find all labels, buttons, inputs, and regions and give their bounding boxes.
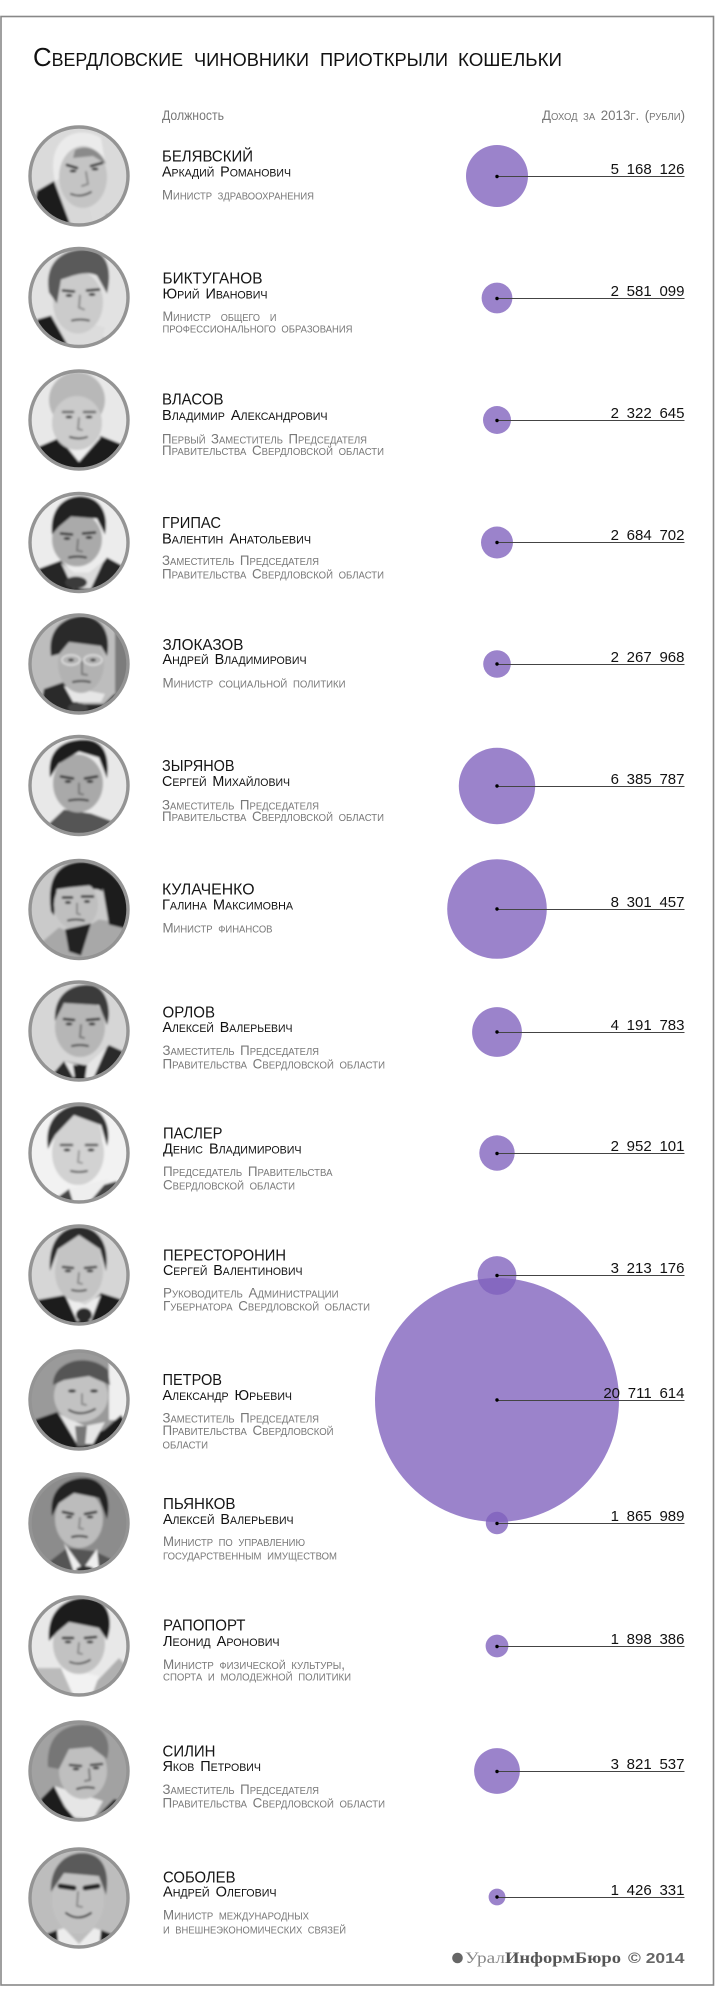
leader line	[495, 419, 684, 422]
bubble: income	[447, 859, 547, 959]
row: Рапопорт	[27, 1594, 684, 1698]
position	[162, 1781, 385, 1810]
photo: Биктуганов	[27, 246, 131, 350]
leader line	[495, 1522, 684, 1525]
title: Свердловские	[33, 42, 183, 72]
value: 2 267 968	[611, 649, 684, 666]
position: спорта и молодежной политики	[163, 1668, 351, 1684]
row: Петров	[27, 1278, 684, 1522]
surname: ПЕРЕСТОРОНИН	[163, 1248, 286, 1265]
position: Заместитель Председателя	[162, 552, 319, 568]
position	[163, 1533, 337, 1562]
photo: Орлов	[27, 979, 131, 1083]
leader line	[495, 175, 684, 178]
bubble: income	[479, 1135, 515, 1171]
position: Заместитель Председателя	[162, 1042, 319, 1058]
position: Свердловской области	[163, 1176, 295, 1192]
row: Белявский	[27, 124, 684, 228]
bubble: income	[483, 406, 511, 434]
position: Заместитель Председателя	[162, 1781, 319, 1797]
bubble: income	[478, 1256, 516, 1295]
leader line	[495, 784, 684, 788]
position: Правительства Свердловской области	[162, 808, 384, 824]
bubble: income	[481, 526, 513, 558]
value: 6 385 787	[611, 771, 684, 788]
bubble: income	[472, 1007, 522, 1057]
row: Злоказов	[27, 612, 684, 716]
position: Председатель Правительства	[163, 1163, 333, 1179]
value: 1 898 386	[611, 1631, 684, 1648]
leader line	[495, 1274, 684, 1277]
footer credit	[452, 1950, 685, 1967]
bubble: income	[486, 1512, 508, 1534]
position	[162, 552, 384, 581]
position	[162, 1042, 385, 1071]
position: профессионального образования	[162, 320, 352, 336]
bubble: income	[482, 283, 512, 313]
row: Силин	[27, 1719, 684, 1823]
leader line	[495, 1398, 684, 1402]
position: Министр физической культуры,	[163, 1656, 345, 1672]
surname: ОРЛОВ	[162, 1005, 215, 1022]
given names: Сергей Михайлович	[162, 773, 290, 790]
position: государственным имуществом	[163, 1546, 337, 1562]
bubble: income	[489, 1889, 505, 1905]
row: Биктуганов	[27, 246, 684, 350]
value: 2 322 645	[611, 405, 684, 422]
bubble: income	[474, 1748, 520, 1794]
position: Правительства Свердловской	[162, 1422, 334, 1438]
photo: Зырянов	[27, 734, 131, 838]
column heading: position: Должность	[162, 107, 224, 123]
given names: Алексей Валерьевич	[163, 1511, 294, 1528]
bubble: income	[483, 650, 511, 678]
photo: Пересторонин	[27, 1223, 131, 1327]
value: 1 426 331	[611, 1882, 684, 1899]
given names: Юрий Иванович	[162, 285, 268, 302]
row: Пересторонин	[27, 1223, 684, 1327]
title: кошельки	[458, 42, 562, 72]
value: 4 191 783	[611, 1017, 684, 1034]
position: Министр международных	[163, 1906, 309, 1922]
position: Губернатора Свердловской области	[163, 1298, 370, 1314]
surname: КУЛАЧЕНКО	[162, 882, 254, 899]
leader line	[495, 1030, 684, 1034]
position: Заместитель Председателя	[162, 796, 319, 812]
bubble: income	[459, 748, 535, 824]
row: Грипас	[27, 490, 684, 594]
given names: Валентин Анатольевич	[162, 530, 311, 547]
position: Правительства Свердловской области	[162, 442, 384, 458]
surname: ПЬЯНКОВ	[163, 1496, 236, 1513]
position	[163, 1163, 333, 1192]
leader line	[495, 1895, 684, 1899]
row: Соболев	[27, 1846, 684, 1950]
value: 8 301 457	[611, 894, 684, 911]
position: Первый Заместитель Председателя	[162, 430, 367, 446]
surname: ПАСЛЕР	[163, 1126, 222, 1143]
given names: Александр Юрьевич	[162, 1387, 292, 1404]
row: Паслер	[27, 1101, 684, 1205]
position: и внешнеэкономических связей	[163, 1920, 346, 1936]
row: Пьянков	[27, 1471, 684, 1575]
row: Кулаченко	[27, 858, 684, 962]
position: Министр здравоохранения	[162, 186, 314, 202]
surname: ПЕТРОВ	[162, 1372, 222, 1389]
given names: Аркадий Романович	[162, 164, 291, 181]
title: приоткрыли	[320, 42, 448, 72]
position: Заместитель Председателя	[162, 1410, 319, 1426]
value: 5 168 126	[611, 161, 684, 178]
photo: Паслер	[27, 1101, 131, 1205]
value: 2 684 702	[611, 527, 684, 544]
position: Министр общего и	[162, 308, 276, 324]
surname: БЕЛЯВСКИЙ	[162, 147, 253, 166]
value: 3 821 537	[611, 1756, 684, 1773]
given names: Денис Владимирович	[163, 1140, 302, 1157]
photo: Рапопорт	[27, 1594, 131, 1698]
photo: Силин	[27, 1719, 131, 1823]
leader line	[495, 1770, 684, 1773]
position: области	[162, 1435, 208, 1451]
surname: РАПОПОРТ	[163, 1618, 246, 1635]
bubble: income	[375, 1278, 619, 1522]
given names: Яков Петрович	[162, 1758, 261, 1775]
position	[162, 430, 384, 458]
photo: Петров	[27, 1348, 131, 1452]
leader line	[495, 1645, 684, 1648]
position: Министр по управлению	[163, 1533, 305, 1549]
position: Руководитель Администрации	[163, 1285, 338, 1301]
photo: Белявский	[27, 124, 131, 228]
row: Орлов	[27, 979, 684, 1083]
position	[162, 1410, 334, 1451]
value: 2 952 101	[611, 1138, 684, 1155]
bubble: income	[486, 1635, 508, 1657]
position	[163, 1285, 370, 1314]
position	[162, 308, 352, 336]
bubble: income	[466, 145, 528, 207]
leader line	[495, 541, 684, 544]
position: Правительства Свердловской области	[162, 1055, 385, 1071]
value: 20 711 614	[603, 1385, 684, 1402]
leader line	[495, 1152, 684, 1155]
row: Власов	[27, 368, 684, 472]
photo: Соболев	[27, 1846, 131, 1950]
surname: ВЛАСОВ	[162, 392, 224, 409]
photo: Грипас	[27, 490, 131, 594]
position	[163, 1656, 351, 1684]
leader line	[495, 907, 684, 911]
row: Зырянов	[27, 734, 684, 838]
given names: Леонид Аронович	[163, 1633, 280, 1650]
surname: СИЛИН	[162, 1744, 216, 1761]
leader line	[495, 297, 684, 300]
position: Министр социальной политики	[162, 674, 346, 690]
surname: СОБОЛЕВ	[163, 1870, 236, 1887]
column heading: income: Доход за 2013г. (рубли)	[542, 107, 685, 123]
photo: Власов	[27, 368, 131, 472]
position	[162, 796, 384, 824]
value: 2 581 099	[611, 283, 684, 300]
footer credit: © 2014	[628, 1950, 685, 1967]
leader line	[495, 662, 684, 666]
title	[33, 42, 562, 72]
photo: Злоказов	[27, 612, 131, 716]
given names: Андрей Олегович	[163, 1884, 276, 1901]
position	[163, 1906, 346, 1936]
surname: ЗЛОКАЗОВ	[162, 637, 244, 654]
value: 1 865 989	[611, 1508, 684, 1525]
surname: ГРИПАС	[162, 515, 221, 532]
value: 3 213 176	[611, 1260, 684, 1277]
surname: ЗЫРЯНОВ	[162, 758, 234, 775]
footer credit: Урал	[465, 1950, 505, 1967]
given names: Сергей Валентинович	[163, 1262, 302, 1279]
footer credit: ИнформБюро	[505, 1950, 621, 1967]
title: чиновники	[194, 42, 309, 72]
given names: Алексей Валерьевич	[162, 1019, 292, 1036]
surname: БИКТУГАНОВ	[162, 271, 262, 288]
given names: Андрей Владимирович	[162, 651, 306, 668]
position: Правительства Свердловской области	[162, 1794, 385, 1810]
position: Министр финансов	[162, 919, 273, 935]
photo: Кулаченко	[27, 858, 131, 962]
position: Правительства Свердловской области	[162, 565, 384, 581]
given names: Галина Максимовна	[162, 896, 294, 913]
given names: Владимир Александрович	[162, 407, 328, 424]
photo: Пьянков	[27, 1471, 131, 1575]
